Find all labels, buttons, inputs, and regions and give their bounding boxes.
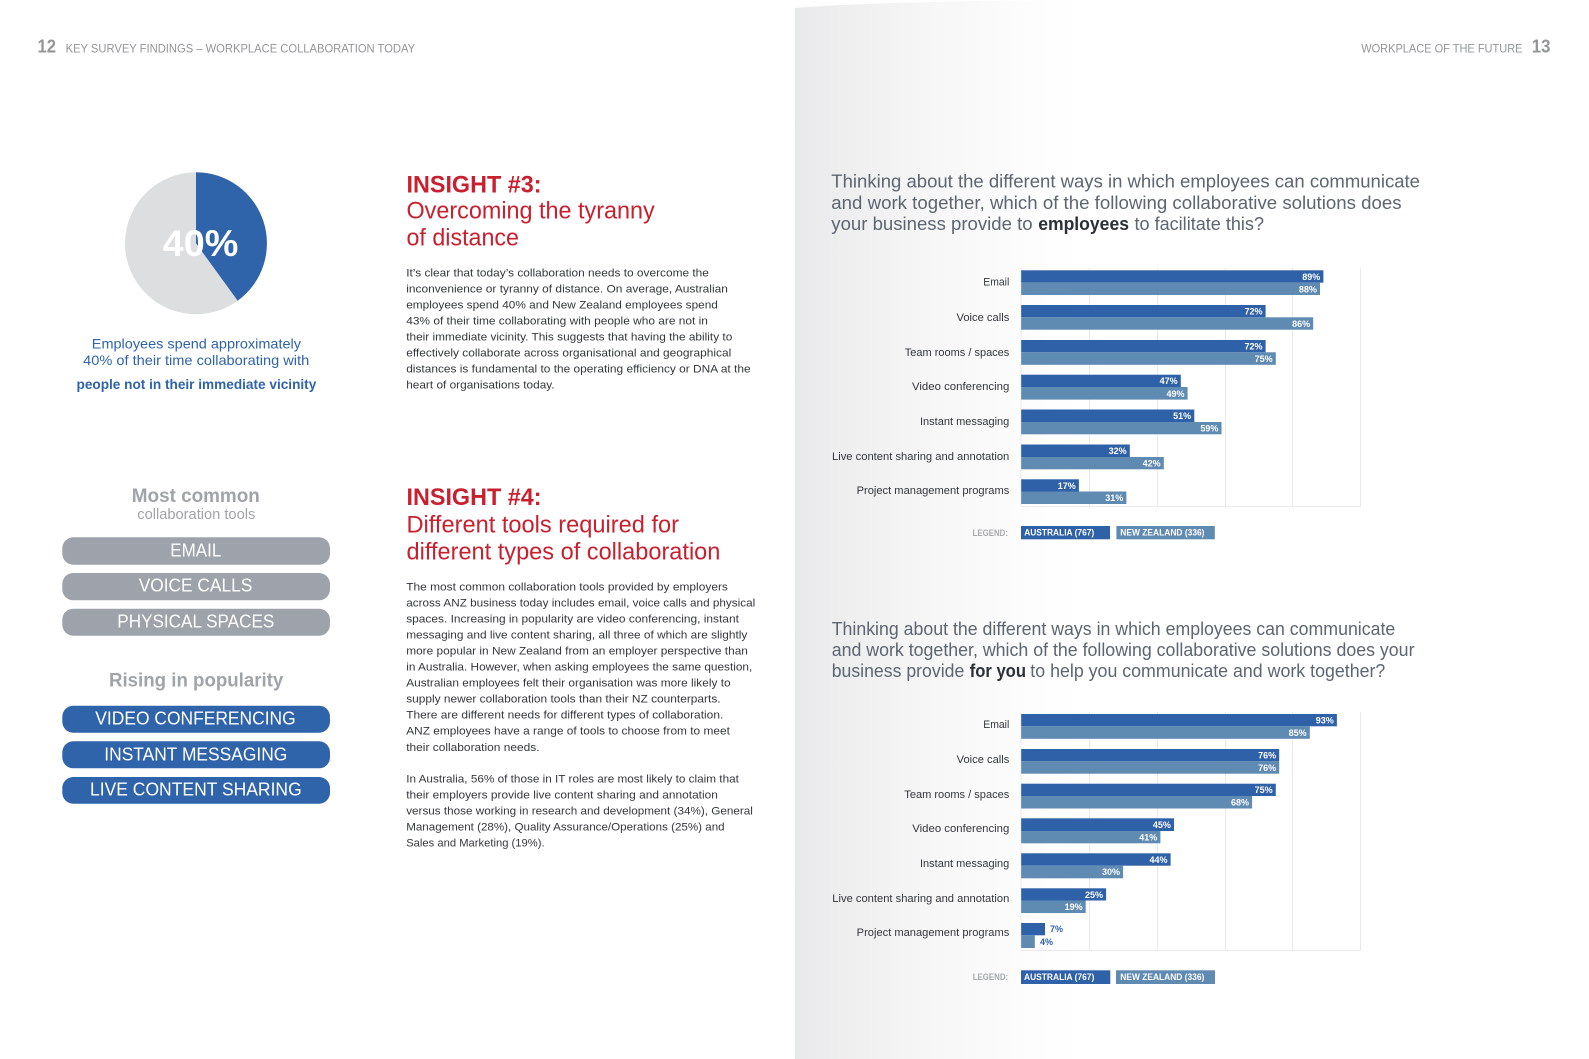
row: project management: 17% [1058, 481, 1076, 491]
heading: insight 3: Overcoming the tyranny [406, 197, 655, 224]
row: live content sharing: 19% [1065, 902, 1083, 912]
question 1: Thinking about the different ways in which employees can communicate [831, 170, 1420, 191]
text block: insight 3 body: distances is fundamental to the operating efficiency or DNA at the [406, 364, 751, 376]
right page header [1361, 37, 1550, 57]
row: email: 89% [1302, 272, 1320, 282]
row: email [983, 270, 1323, 295]
row: live content sharing: 32% [1109, 446, 1127, 456]
row: team rooms: 75% [1255, 354, 1273, 364]
question 2: and work together, which of the following collaborative solutions does your [832, 639, 1414, 660]
pills: rising tools [62, 706, 330, 804]
pills: rising tools: VIDEO CONFERENCING [95, 708, 296, 729]
row: team rooms: Team rooms / spaces [905, 347, 1010, 359]
text block: insight 4 body: spaces. Increasing in popularity are video conferencing, instant [406, 614, 740, 626]
legend 1: AUSTRALIA (767) [1024, 527, 1094, 537]
text block: insight 3 body: employees spend 40% and New Zealand employees spend [406, 300, 718, 312]
legend 2 [973, 970, 1215, 984]
row: live content sharing [832, 444, 1164, 469]
row: voice calls: 86% [1292, 319, 1310, 329]
heading: most common tools [132, 486, 260, 523]
right page shaded background [795, 0, 1090, 1059]
text block: insight 4 body: in Australia. However, when asking employees the same question, [406, 662, 752, 674]
row: video conferencing [912, 375, 1188, 400]
row: live content sharing [832, 888, 1106, 913]
row: video conferencing: Video conferencing [912, 823, 1009, 835]
row: voice calls [956, 305, 1313, 330]
legend 1: LEGEND: [972, 528, 1008, 538]
row: live content sharing: 42% [1143, 458, 1161, 468]
bar chart 2 [832, 712, 1361, 950]
heading: insight 4: Different tools required for [406, 511, 679, 538]
row: instant messaging: 59% [1200, 423, 1218, 433]
row: email: 85% [1289, 728, 1307, 738]
heading: insight 4: INSIGHT #4: [406, 484, 542, 511]
row: video conferencing: 49% [1166, 389, 1184, 399]
pills: most common tools: PHYSICAL SPACES [117, 610, 274, 632]
row: video conferencing [912, 818, 1174, 843]
heading: insight 3: of distance [406, 224, 519, 252]
question 2: for you [970, 660, 1026, 681]
row: team rooms [905, 340, 1276, 365]
heading: most common tools: collaboration tools [137, 507, 255, 523]
right page header: WORKPLACE OF THE FUTURE [1361, 43, 1523, 56]
question 1: employees [1038, 213, 1129, 234]
row: project management: 4% [1040, 937, 1053, 947]
text block: insight 3 body: effectively collaborate across organisational and geographical [406, 348, 731, 360]
row: project management [857, 479, 1126, 504]
pie caption: Employees spend approximately [92, 335, 301, 351]
text block: insight 3 body: heart of organisations today. [406, 380, 555, 392]
left page header [38, 37, 415, 57]
text block: insight 4 body: supply newer collaboration tools than their NZ counterparts. [406, 694, 721, 706]
legend 1 [972, 526, 1215, 539]
row: team rooms: Team rooms / spaces [904, 789, 1010, 801]
row: project management: 7% [1050, 924, 1063, 934]
pie caption: people not in their immediate vicinity [76, 376, 316, 392]
text block: insight 4 body: In Australia, 56% of those in IT roles are most likely to claim that [406, 774, 740, 786]
row: team rooms [904, 784, 1276, 808]
right page header: 13 [1532, 37, 1550, 57]
left page header: 12 [38, 37, 56, 57]
row: project management: Project management programs [857, 927, 1010, 939]
heading: insight 3: INSIGHT #3: [406, 171, 542, 198]
question 1: to facilitate this? [1134, 213, 1264, 234]
pie chart: 40% of time: 40% [163, 223, 238, 264]
text block: insight 4 body: across ANZ business today includes email, voice calls and physical [406, 598, 755, 610]
row: team rooms: 68% [1231, 798, 1249, 808]
pills: most common tools: EMAIL [170, 540, 221, 560]
row: instant messaging: 30% [1102, 867, 1120, 877]
text block: insight 4 body: There are different needs for different types of collaboration. [406, 710, 723, 722]
row: voice calls: 76% [1258, 763, 1276, 773]
row: instant messaging [920, 853, 1171, 878]
row: email: 93% [1316, 716, 1334, 726]
text block: insight 4 body: Australian employees felt their organisation was more likely to [406, 678, 731, 690]
question 2: to help you communicate and work together? [1030, 660, 1385, 681]
heading: rising in popularity: Rising in popularity [109, 671, 284, 692]
text block: insight 4 body: their collaboration needs. [406, 742, 540, 754]
row: instant messaging: Instant messaging [920, 858, 1009, 870]
row: email: 88% [1299, 284, 1317, 294]
bar chart 1 [832, 268, 1361, 506]
text block: insight 4 body: The most common collaboration tools provided by employers [406, 582, 728, 594]
text block: insight 4 body: Sales and Marketing (19%). [406, 838, 545, 850]
legend 2: LEGEND: [973, 972, 1008, 982]
row: live content sharing: Live content sharing and annotation [832, 451, 1009, 463]
pills: most common tools [62, 537, 330, 636]
row: voice calls: 76% [1258, 750, 1276, 760]
heading: insight 3 [406, 171, 655, 252]
row: email: Email [983, 276, 1009, 288]
row: team rooms: 72% [1244, 342, 1262, 352]
legend 2: NEW ZEALAND (336) [1120, 972, 1204, 982]
text block: insight 4 body: ANZ employees have a range of tools to choose from to meet [406, 726, 731, 738]
row: live content sharing: 25% [1085, 890, 1103, 900]
row: project management: Project management programs [857, 485, 1010, 497]
row: team rooms: 75% [1255, 785, 1273, 795]
question 1: your business provide to [831, 213, 1033, 234]
question 1 [831, 170, 1420, 234]
text block: insight 4 body: versus those working in research and development (34%), General [406, 806, 753, 818]
row: project management: 31% [1105, 493, 1123, 503]
heading: most common tools: Most common [132, 486, 260, 507]
row: email [983, 714, 1337, 739]
row: project management [857, 923, 1063, 948]
question 2: Thinking about the different ways in which employees can communicate [832, 618, 1395, 639]
pills: most common tools: VOICE CALLS [139, 575, 252, 596]
legend 1: NEW ZEALAND (336) [1120, 527, 1205, 537]
heading: insight 4: different types of collaboration [406, 538, 720, 566]
text block: insight 4 body: their employers provide live content sharing and annotation [406, 790, 718, 802]
text block: insight 4 body [406, 582, 755, 850]
row: email: Email [983, 719, 1009, 731]
row: video conferencing: 41% [1139, 832, 1157, 842]
row: instant messaging [920, 410, 1222, 434]
text block: insight 4 body: messaging and live content sharing, all three of which are slightly [406, 630, 748, 642]
row: instant messaging: Instant messaging [920, 416, 1009, 428]
pie chart: 40% of time [125, 172, 267, 314]
pie caption [76, 335, 316, 392]
row: video conferencing: Video conferencing [912, 381, 1009, 393]
row: voice calls: Voice calls [957, 754, 1010, 766]
text block: insight 4 body: Management (28%), Quality Assurance/Operations (25%) and [406, 822, 725, 834]
text block: insight 3 body [406, 268, 751, 392]
question 2 [832, 618, 1414, 681]
pills: rising tools: INSTANT MESSAGING [104, 744, 287, 765]
row: video conferencing: 45% [1153, 820, 1171, 830]
pills: rising tools: LIVE CONTENT SHARING [90, 779, 302, 800]
text block: insight 3 body: inconvenience or tyranny of distance. On average, Australian [406, 284, 728, 296]
row: instant messaging: 44% [1149, 855, 1168, 865]
row: live content sharing: Live content sharing and annotation [832, 893, 1009, 905]
legend 2: AUSTRALIA (767) [1024, 972, 1094, 982]
text block: insight 3 body: their immediate vicinity. This suggests that having the ability to [406, 332, 732, 344]
left page header: KEY SURVEY FINDINGS – WORKPLACE COLLABORATION TODAY [66, 43, 415, 56]
row: voice calls: Voice calls [956, 312, 1010, 324]
heading: insight 4 [406, 484, 720, 566]
text block: insight 3 body: It’s clear that today’s collaboration needs to overcome the [406, 268, 709, 280]
pie caption: 40% of their time collaborating with [83, 352, 309, 368]
text block: insight 3 body: 43% of their time collaborating with people who are not in [406, 316, 708, 328]
row: instant messaging: 51% [1173, 411, 1191, 421]
row: voice calls [957, 749, 1279, 774]
row: voice calls: 72% [1244, 307, 1262, 317]
question 1: and work together, which of the following collaborative solutions does [831, 192, 1402, 213]
text block: insight 4 body: more popular in New Zealand from an employer perspective than [406, 646, 748, 658]
question 2: business provide [832, 660, 964, 681]
row: video conferencing: 47% [1160, 376, 1178, 386]
